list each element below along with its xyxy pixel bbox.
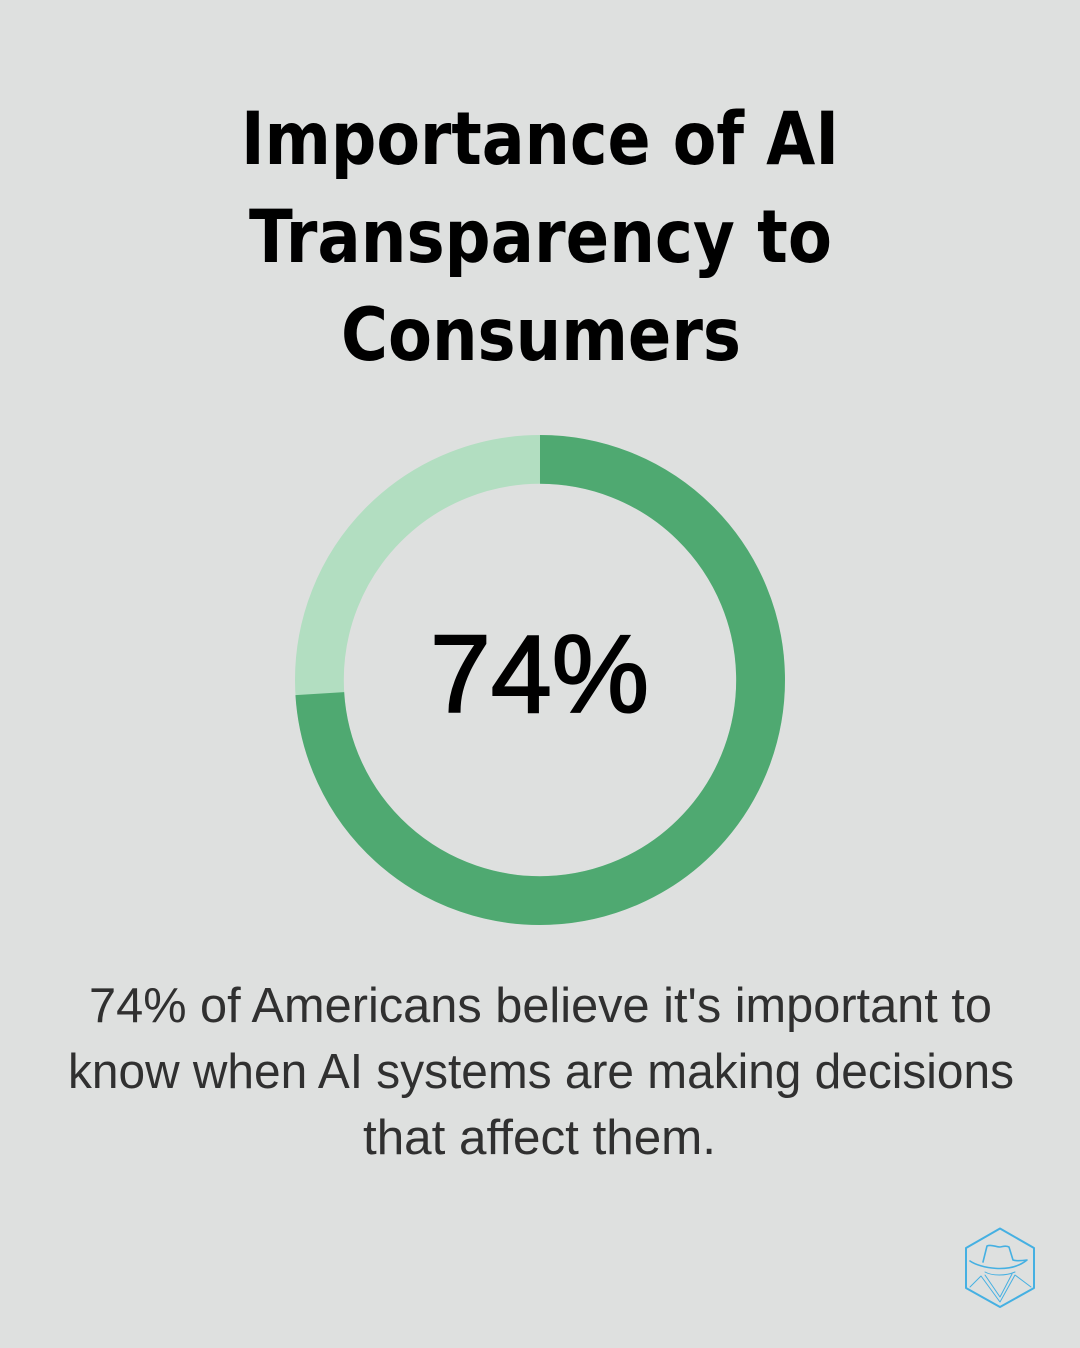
title: Transparency to [249, 195, 832, 280]
title: Consumers [341, 293, 741, 378]
description text: know when AI systems are making decisions [68, 1045, 1014, 1099]
center value: 74% [430, 613, 649, 736]
remaining 26% segment [319, 459, 761, 901]
74% segment [320, 459, 761, 901]
description text [68, 979, 1014, 1165]
title [241, 97, 839, 378]
title: Importance of AI [241, 97, 839, 182]
description text: that affect them. [363, 1111, 716, 1165]
donut chart: 74% [319, 459, 761, 901]
description text: 74% of Americans believe it's important to [89, 979, 992, 1033]
icon: logo, hat spy in hexagon [966, 1228, 1034, 1307]
